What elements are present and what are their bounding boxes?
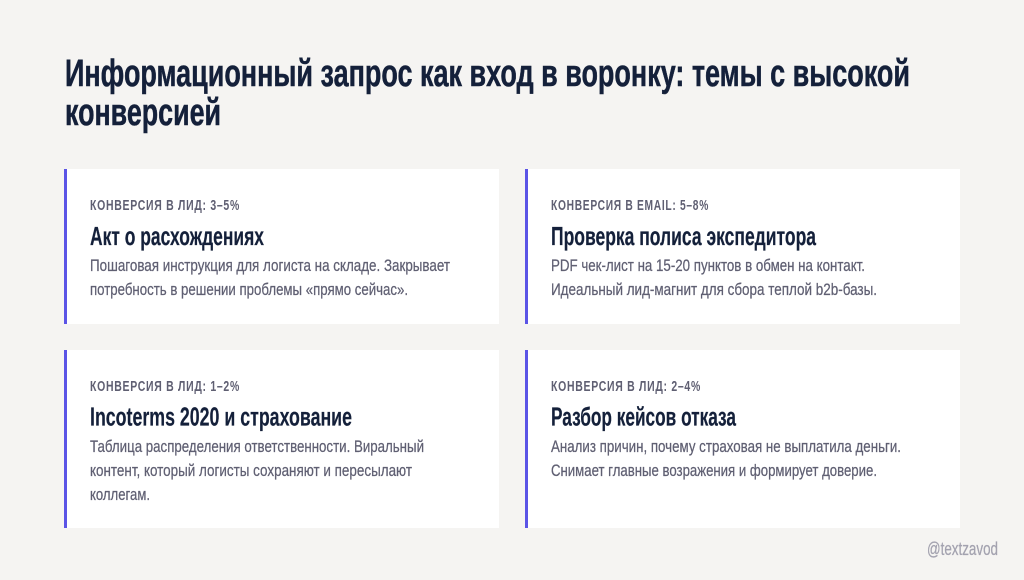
card description: коллегам. — [90, 485, 150, 504]
card description: Анализ причин, почему страховая не выплатила деньги. — [551, 437, 901, 456]
card heading: Incoterms 2020 и страхование — [90, 402, 352, 432]
panel: Акт о расхождениях — [64, 169, 499, 324]
card description — [551, 437, 901, 480]
panel: Проверка полиса экспедитора — [525, 169, 960, 324]
title — [65, 53, 910, 134]
card description — [90, 437, 424, 504]
card description: Таблица распределения ответственности. Виральный — [90, 437, 424, 456]
conversion label: КОНВЕРСИЯ В EMAIL: 5–8% — [551, 198, 709, 214]
panel: Разбор кейсов отказа — [525, 350, 960, 528]
conversion label: КОНВЕРСИЯ В ЛИД: 1–2% — [90, 379, 240, 395]
card description: Снимает главные возражения и формирует доверие. — [551, 461, 877, 480]
conversion label: КОНВЕРСИЯ В ЛИД: 2–4% — [551, 379, 701, 395]
watermark: @textzavod — [927, 539, 998, 559]
card heading: Проверка полиса экспедитора — [551, 221, 816, 251]
panel: Incoterms 2020 и страхование — [64, 350, 499, 528]
card heading: Разбор кейсов отказа — [551, 402, 736, 432]
card heading: Акт о расхождениях — [90, 221, 264, 251]
card description — [90, 256, 450, 299]
conversion label: КОНВЕРСИЯ В ЛИД: 3–5% — [90, 198, 240, 214]
card description: Пошаговая инструкция для логиста на складе. Закрывает — [90, 256, 450, 275]
card description — [551, 256, 877, 299]
card description: контент, который логисты сохраняют и пересылают — [90, 461, 412, 480]
card description: Идеальный лид-магнит для сбора теплой b2b-базы. — [551, 280, 877, 299]
card description: потребность в решении проблемы «прямо сейчас». — [90, 280, 408, 299]
title: конверсией — [65, 92, 221, 134]
card description: PDF чек-лист на 15-20 пунктов в обмен на контакт. — [551, 256, 865, 275]
